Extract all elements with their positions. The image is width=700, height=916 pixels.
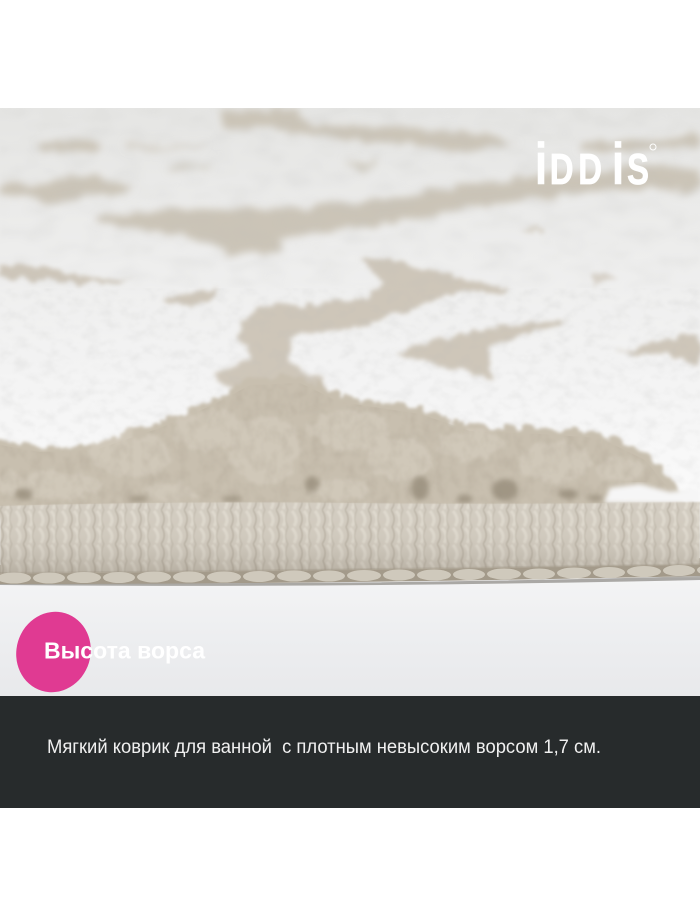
small white tuft at right edge xyxy=(604,484,700,504)
logo registered mark xyxy=(650,144,656,150)
infographic page xyxy=(0,108,700,808)
dark caption band xyxy=(0,696,700,808)
rug white pile area xyxy=(0,108,700,438)
blurred beige rug pattern far xyxy=(0,108,700,255)
pile strand texture xyxy=(0,408,630,501)
far pile texture overlay xyxy=(0,108,700,288)
rug braided edge xyxy=(0,502,700,584)
logo: iDDiS xyxy=(535,132,656,196)
scalloped cord xyxy=(0,564,700,584)
shadow under rug xyxy=(0,576,700,586)
caption band background xyxy=(0,696,700,808)
braided binding band xyxy=(0,502,700,573)
beige pile front edge xyxy=(0,376,700,515)
binding band shading xyxy=(0,502,700,573)
logo wordmark: D xyxy=(550,146,574,194)
heading: Высота ворса: Высота ворса xyxy=(44,638,205,664)
pink blob badge xyxy=(6,602,101,702)
logo wordmark: i xyxy=(535,132,547,196)
logo wordmark: i xyxy=(612,132,624,196)
cord backing xyxy=(0,558,700,584)
shadows between pile tufts xyxy=(15,476,603,503)
caption text: Мягкий коврик для ванной с плотным невысоким ворсом 1,7 см. xyxy=(47,737,601,758)
photo: rug pile close-up xyxy=(0,108,700,696)
logo wordmark: D xyxy=(578,146,602,194)
blurred beige rug pattern middle xyxy=(0,228,700,405)
logo wordmark: S xyxy=(627,146,649,194)
near pile texture overlay xyxy=(4,323,695,467)
floor surface under the rug xyxy=(0,578,700,696)
